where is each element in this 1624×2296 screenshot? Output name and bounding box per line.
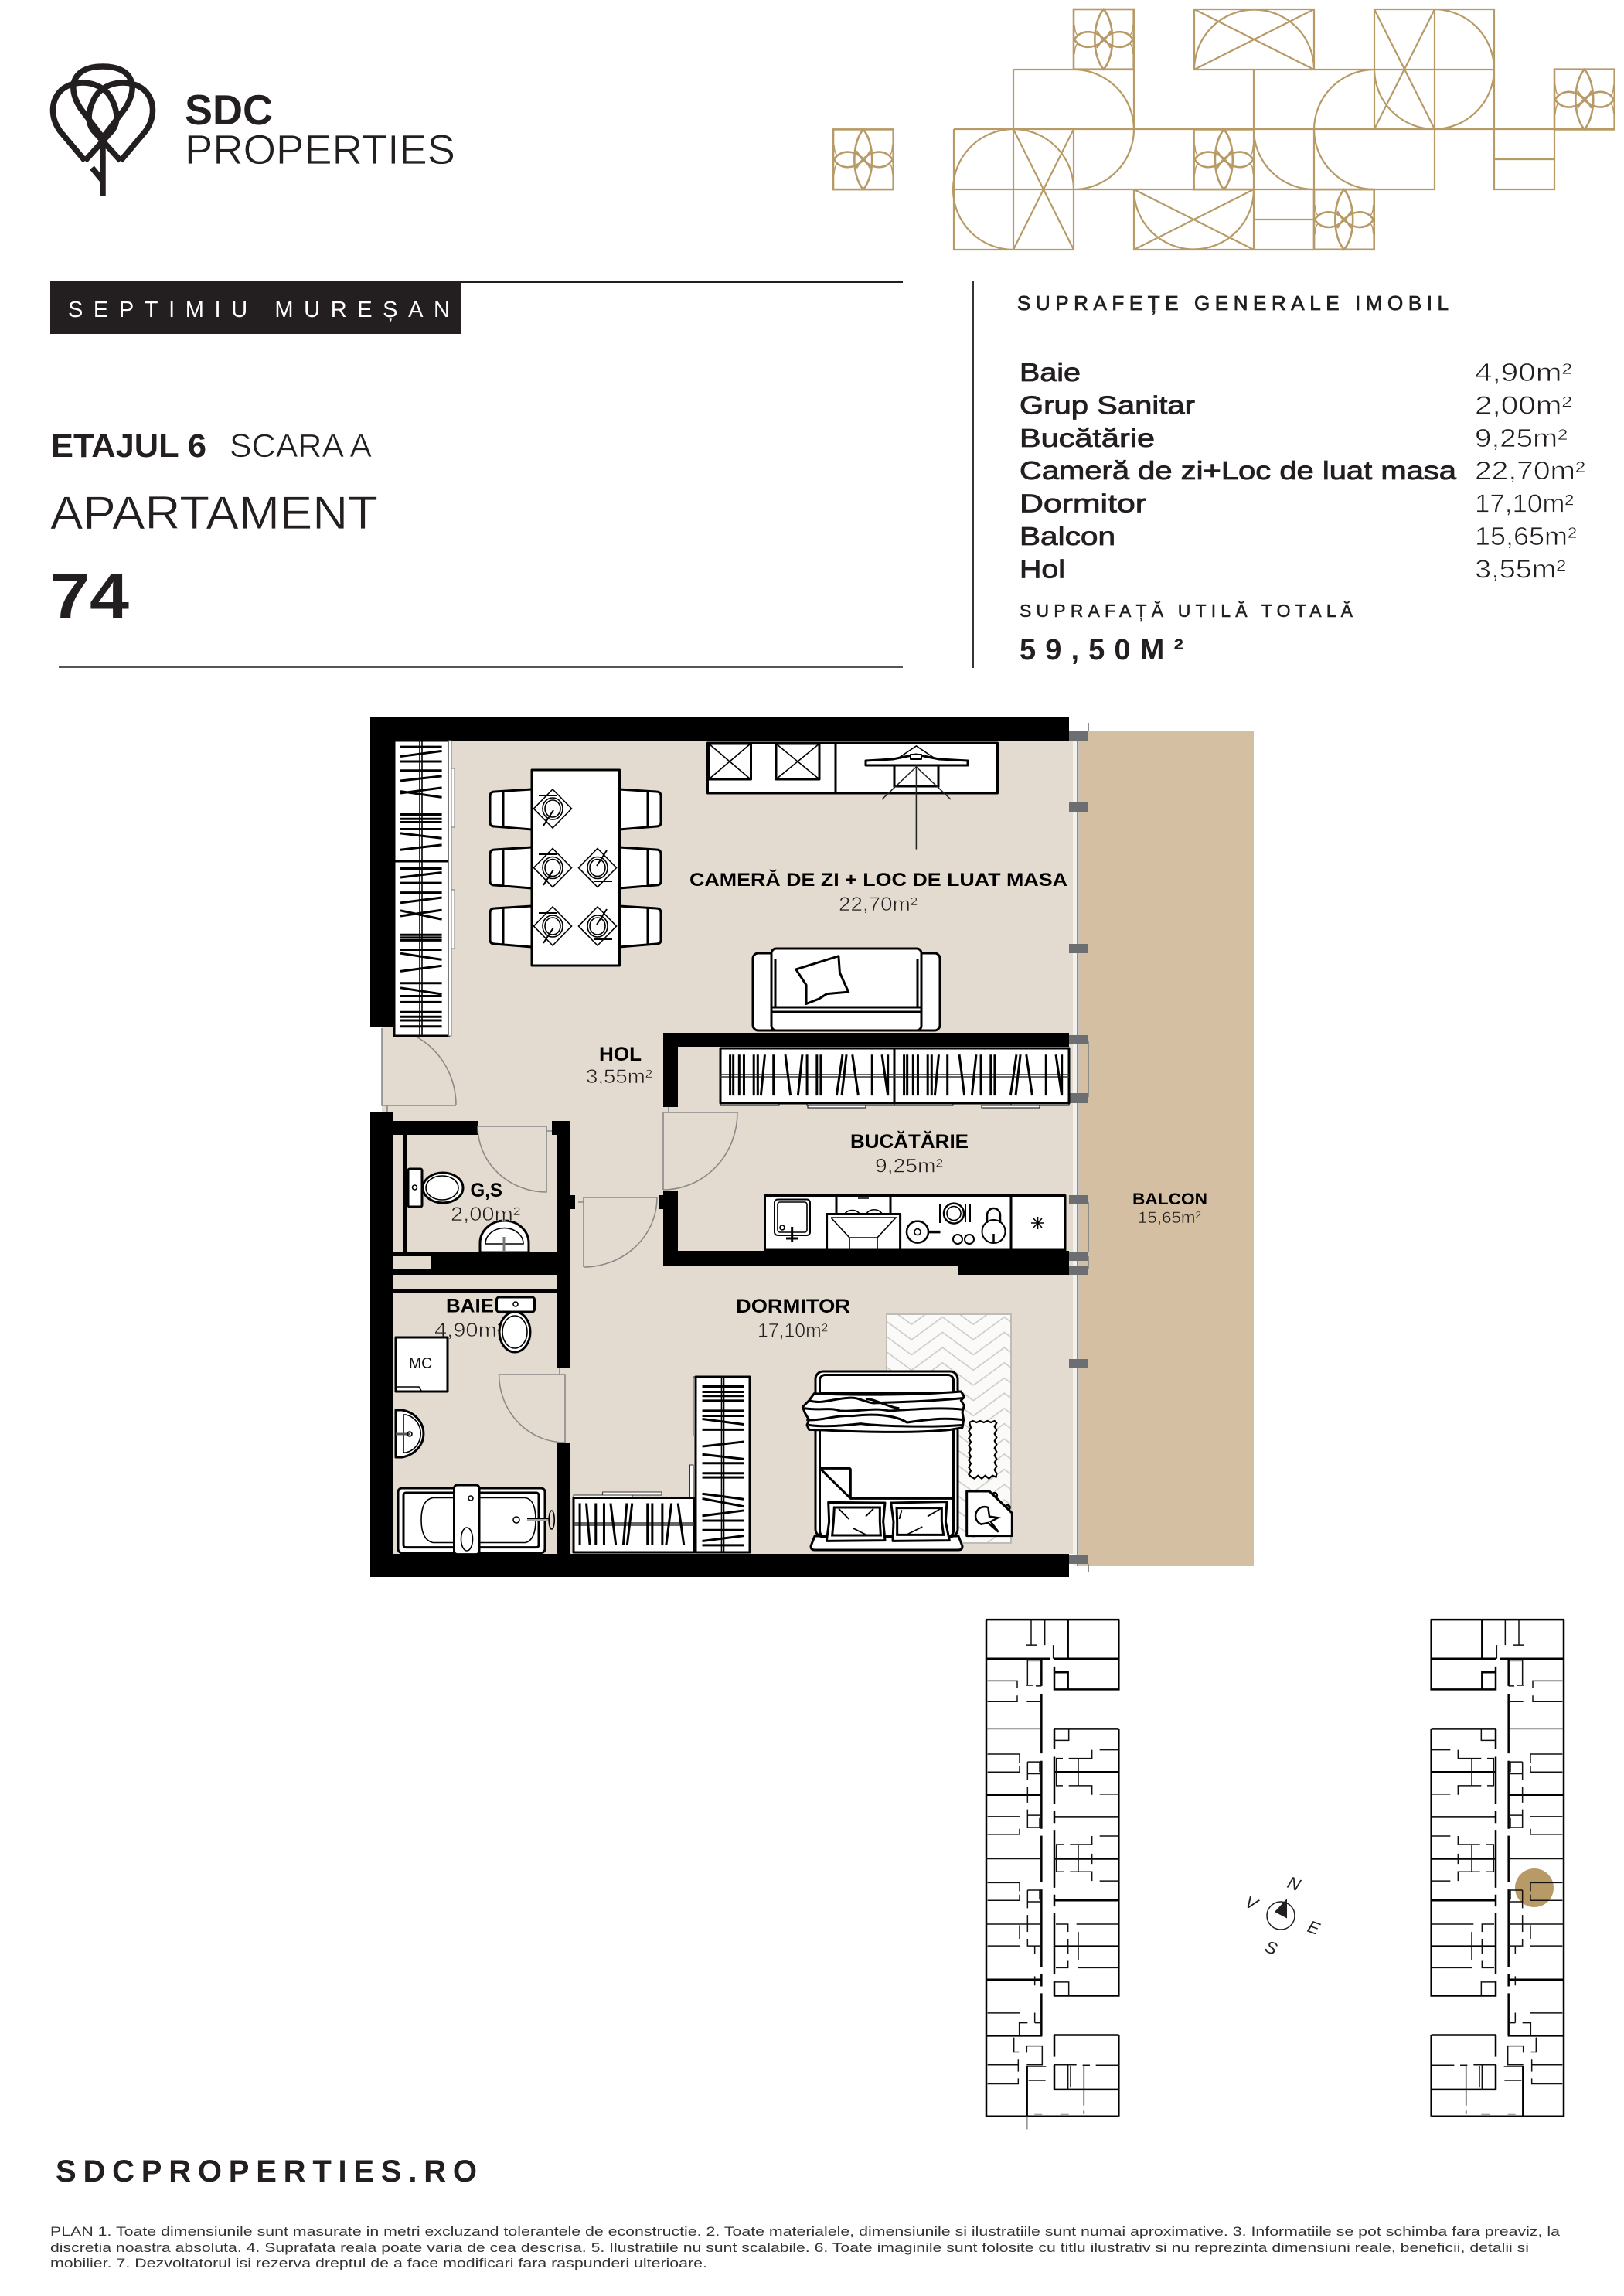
- apartment location marker: [1515, 1868, 1554, 1907]
- sofa pillow: [796, 956, 849, 1004]
- chairs: [490, 789, 661, 947]
- table values: 15,65m²: [1475, 522, 1577, 550]
- table values: 22,70m²: [1475, 456, 1585, 485]
- interior floor: [382, 741, 1074, 1554]
- table labels: Cameră de zi+Loc de luat masa: [1020, 456, 1457, 485]
- sofa: [753, 949, 940, 1030]
- decorative gold geometric pattern: [833, 9, 1615, 250]
- logo icon: tree of three drops: [53, 66, 153, 196]
- legal footnote: discretia noastra absoluta. 4. Suprafata reala poate varia de cea descrisa. 5. Ilustratiile nu sunt scalabile. 6. Toate imaginile sunt folosite cu titlu ilustrativ si nu reprezinta dimensiuni reale, beneficii, detalii si: [50, 2240, 1529, 2255]
- apartment number: 74: [50, 560, 129, 632]
- wardrobe: kitchen: [720, 1048, 1069, 1108]
- blanket fold: [820, 1468, 850, 1498]
- label: hall: [586, 1044, 652, 1088]
- compass: E: [1305, 1916, 1323, 1939]
- bathroom: [396, 1296, 554, 1555]
- window line: [1069, 723, 1088, 1572]
- label: kitchen: BUCĂTĂRIE: [850, 1130, 969, 1153]
- place settings: [533, 789, 617, 945]
- TV unit: [708, 743, 997, 850]
- legal footnote: mobilier. 7. Dezvoltatorul isi rezerva dreptul de a face modificari fara raspunderi ulterioare.: [50, 2256, 707, 2270]
- table values: 2,00m²: [1475, 390, 1572, 419]
- boiler MC: MC: [409, 1355, 432, 1372]
- label: bedroom: 17,10m²: [758, 1320, 828, 1342]
- building key plan: left: [986, 1620, 1119, 2129]
- table values: 17,10m²: [1475, 489, 1574, 518]
- table labels: [1020, 358, 1457, 583]
- compass: V: [1242, 1892, 1262, 1915]
- label: hall: HOL: [599, 1044, 642, 1065]
- table labels: Hol: [1020, 554, 1065, 583]
- label: balcony: [1132, 1191, 1207, 1227]
- toilet bath: [496, 1297, 535, 1352]
- floor plan: [370, 717, 1254, 1577]
- sink bath: [396, 1410, 424, 1457]
- logo: SDC Properties: [53, 66, 455, 196]
- table labels: Grup Sanitar: [1020, 390, 1195, 419]
- divider vertical: [972, 281, 974, 668]
- wardrobe: living room: [394, 741, 455, 1036]
- heading: floor and staircase: SCARA A: [230, 428, 372, 465]
- label: kitchen: 9,25m²: [875, 1156, 943, 1177]
- kitchen sink: [775, 1200, 810, 1242]
- rug: [887, 1314, 1011, 1543]
- label G,S: G,S: [470, 1180, 502, 1201]
- label: bedroom: [736, 1296, 850, 1342]
- dining table with chairs: [490, 770, 661, 966]
- label: living room: [689, 869, 1067, 915]
- label bath area: 4,90m²: [434, 1320, 504, 1341]
- fridge star: [1031, 1217, 1044, 1229]
- wardrobes: bedroom: [574, 1377, 750, 1552]
- label: living room: CAMERĂ DE ZI + LOC DE LUAT MASA: [689, 869, 1067, 891]
- nightstand with lamp: [967, 1491, 1012, 1536]
- cookware: [907, 1204, 1005, 1244]
- kitchen unit: [765, 1195, 1065, 1250]
- building key plan: right: [1431, 1620, 1564, 2117]
- table values: 9,25m²: [1475, 424, 1568, 452]
- table values: [1475, 358, 1585, 583]
- logo text SDC: SDC: [185, 86, 273, 134]
- legal footnote: [50, 2224, 1561, 2270]
- label: hall: 3,55m²: [586, 1066, 652, 1088]
- heading: floor and staircase: [51, 428, 372, 465]
- compass: N: [1285, 1872, 1303, 1895]
- label: balcony: 15,65m²: [1138, 1209, 1201, 1227]
- boiler MC: [396, 1337, 448, 1392]
- label: balcony: BALCON: [1132, 1191, 1207, 1208]
- doors: [382, 1028, 737, 1443]
- table labels: Dormitor: [1020, 489, 1146, 518]
- stove hood: [827, 1198, 901, 1250]
- address banner: SEPTIMIU MUREȘAN: [68, 298, 450, 322]
- compass: S: [1262, 1937, 1280, 1959]
- table labels: Bucătărie: [1020, 424, 1155, 452]
- label bath: BAIE: [446, 1296, 494, 1317]
- table values: 4,90m²: [1475, 358, 1572, 387]
- G,S room: [408, 1169, 529, 1252]
- table heading: SUPRAFEȚE GENERALE IMOBIL: [1017, 291, 1449, 315]
- legal footnote: PLAN 1. Toate dimensiunile sunt masurate in metri excluzand tolerantele de econstructie. 2. Toate materialele, dimensiunile si ilustratiile sunt numai aproximative. 3. Informatiile se pot schimba fara preaviz, la: [50, 2224, 1561, 2239]
- bed: [802, 1371, 1012, 1550]
- label GS area: 2,00m²: [451, 1204, 521, 1225]
- logo text PROPERTIES: PROPERTIES: [185, 127, 455, 173]
- table values: 3,55m²: [1475, 554, 1566, 583]
- total label: SUPRAFAȚĂ UTILĂ TOTALĂ: [1020, 601, 1353, 621]
- panel: surface table: [1017, 291, 1585, 666]
- website: SDCPROPERTIES.RO: [56, 2155, 477, 2189]
- label: kitchen: [850, 1130, 969, 1177]
- bed foot: [811, 1536, 962, 1550]
- bed pillows: [826, 1502, 949, 1541]
- address banner: [50, 281, 903, 334]
- bed frame: [815, 1371, 958, 1537]
- divider under heading: [59, 666, 903, 668]
- bath mat: [969, 1421, 996, 1479]
- bathtub: [398, 1485, 554, 1555]
- label: bedroom: DORMITOR: [736, 1296, 850, 1317]
- heading: floor and staircase: ETAJUL 6: [51, 428, 206, 465]
- heading: apartment: APARTAMENT: [50, 487, 378, 539]
- balcony: [1079, 731, 1254, 1566]
- toilet GS: [408, 1169, 463, 1207]
- table labels: Baie: [1020, 358, 1081, 387]
- total value: 59,50M²: [1020, 634, 1183, 666]
- duvet: [802, 1392, 964, 1432]
- label: living room: 22,70m²: [839, 894, 918, 915]
- walls: [370, 717, 1069, 1577]
- table labels: Balcon: [1020, 522, 1115, 550]
- sink GS: [480, 1221, 529, 1252]
- compass: [1242, 1872, 1323, 1959]
